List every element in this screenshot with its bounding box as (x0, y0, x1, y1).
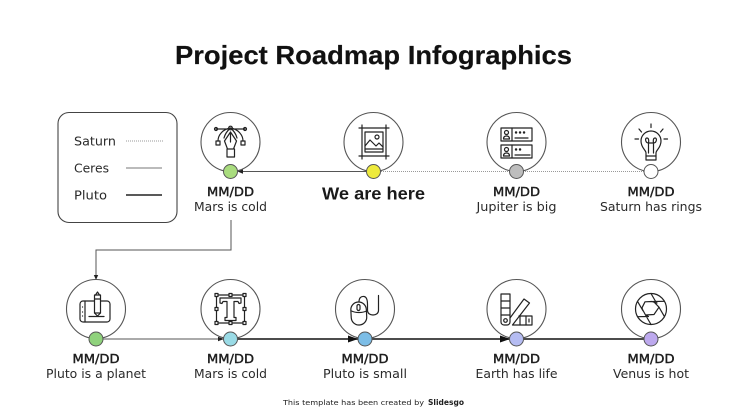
title: Project Roadmap Infographics (175, 40, 572, 70)
footer credit (282, 398, 464, 407)
milestone: Jupiter is big (475, 112, 556, 214)
connector: arrow to Mars (238, 169, 373, 174)
milestone: Jupiter is big: MM/DD (493, 185, 540, 199)
icon: camera aperture (636, 294, 666, 324)
milestone: Saturn has rings (600, 112, 702, 214)
milestone: We are here (322, 112, 425, 204)
milestone: Jupiter is big: Jupiter is big (475, 199, 556, 214)
milestone: Venus is hot (613, 280, 689, 381)
milestone: Mars is cold (bottom): Mars is cold (194, 366, 267, 381)
milestone: Pluto is small (323, 280, 407, 381)
connector: elbow arrow down to second row (94, 220, 231, 280)
milestone: Pluto is a planet (46, 280, 146, 381)
legend panel (58, 112, 177, 222)
milestone: Mars is cold (top) (194, 112, 267, 214)
milestone: We are here: We are here (322, 184, 425, 204)
milestone: Pluto is small: Pluto is small (323, 366, 407, 381)
icon: colour swatches (501, 294, 532, 325)
milestone: Mars is cold (bottom) (194, 280, 267, 381)
milestone: Mars is cold (top): Mars is cold (194, 199, 267, 214)
icon: text frame (215, 294, 246, 324)
milestone: Pluto is a planet: Pluto is a planet (46, 366, 146, 381)
milestone: Earth has life (476, 280, 558, 381)
milestone: Saturn has rings: MM/DD (628, 185, 674, 199)
legend panel: Pluto (74, 188, 107, 202)
connector: dotted future path (373, 170, 651, 172)
milestone: Mars is cold (bottom): MM/DD (207, 352, 254, 366)
milestone: Mars is cold (top): MM/DD (207, 185, 254, 199)
footer credit: Slidesgo (428, 398, 464, 407)
milestone: Pluto is a planet: MM/DD (72, 352, 120, 366)
connector: thick arrows along second row (230, 336, 651, 342)
footer credit: This template has been created by (282, 399, 424, 407)
milestone: Saturn has rings: Saturn has rings (600, 199, 702, 214)
milestone: Venus is hot: MM/DD (628, 352, 674, 366)
milestone: Venus is hot: Venus is hot (613, 366, 689, 381)
legend panel: Saturn (74, 134, 116, 148)
icon: profile cards (501, 128, 532, 158)
icon: computer mouse (350, 296, 378, 325)
icon: framed image (359, 125, 389, 159)
legend panel: Ceres (74, 160, 109, 176)
milestone: Earth has life: MM/DD (493, 352, 540, 366)
icon: light bulb (635, 124, 668, 160)
milestone: Pluto is small: MM/DD (342, 352, 388, 366)
milestone: Earth has life: Earth has life (476, 366, 558, 381)
icon: pen tool (214, 126, 246, 157)
icon: graphic tablet (80, 292, 110, 322)
connector: thin arrow Pluto to Mars (96, 337, 224, 341)
